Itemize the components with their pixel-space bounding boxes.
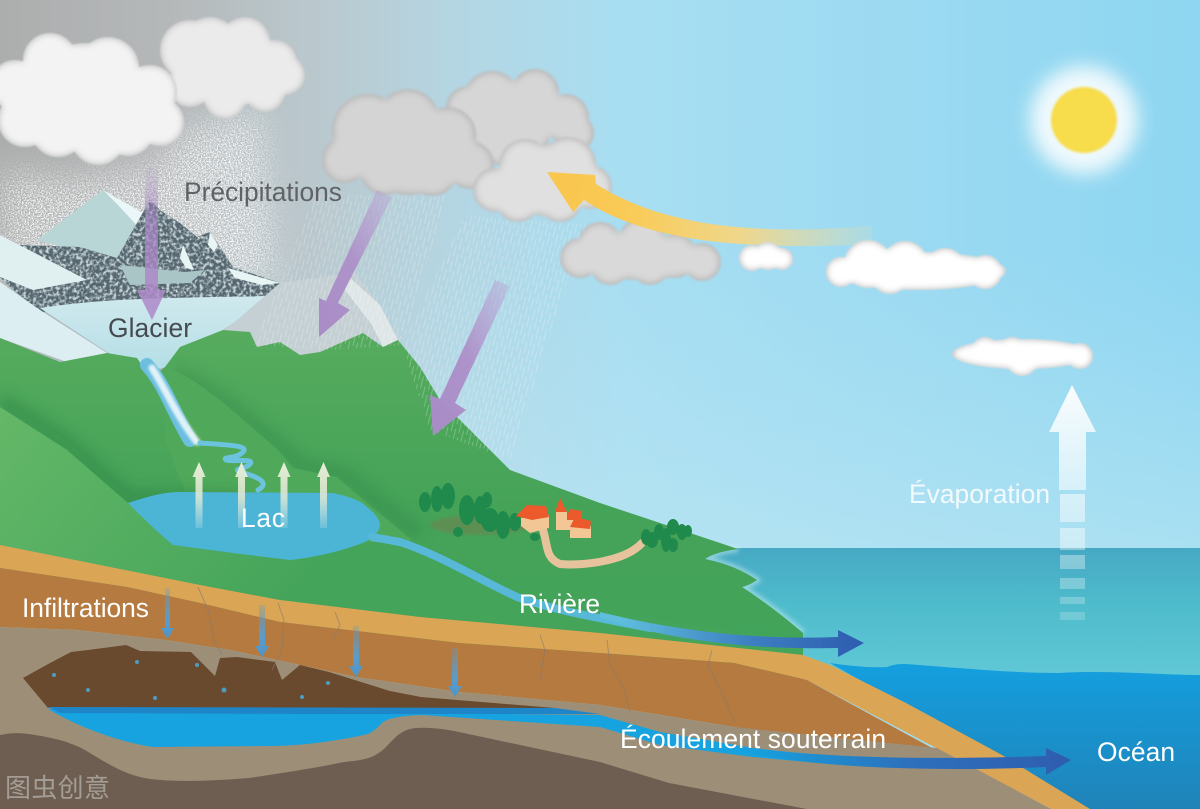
left hill [0, 407, 803, 680]
label: Écoulement souterrain: Écoulement souterrain [620, 724, 886, 754]
water drops [52, 660, 330, 700]
cloud: white right [826, 240, 1006, 294]
path [543, 530, 642, 564]
cracks in rock layers [198, 587, 735, 722]
trees left [419, 483, 540, 541]
underground flow arrow [740, 747, 1071, 775]
evaporation arrow [1049, 385, 1096, 620]
yellow wind arrow [547, 172, 872, 246]
ridge hill [165, 367, 412, 545]
sun [1030, 66, 1138, 174]
cloud: top left white [0, 33, 184, 165]
infiltration arrows [161, 588, 462, 697]
church [555, 498, 583, 530]
coast glow [705, 549, 803, 633]
deep ocean [830, 663, 1200, 809]
groundwater dark band [48, 707, 600, 714]
main green [0, 330, 803, 680]
river arrow [600, 612, 864, 657]
river [372, 537, 650, 628]
second house [570, 517, 591, 538]
cloud: large grey [322, 89, 494, 196]
bottom bedrock [0, 728, 807, 809]
white evaporation arrows over lake [192, 462, 330, 528]
glacier mountain [0, 190, 280, 368]
precipitation arrows [137, 168, 510, 436]
sky background [0, 0, 1200, 560]
snow ridge [103, 190, 143, 232]
watermark: 图虫创意 [5, 773, 110, 803]
green land [0, 330, 803, 680]
left snow slope [0, 282, 107, 362]
label: Océan: Océan [1097, 737, 1175, 767]
snowy peak [37, 190, 185, 262]
snow face [345, 278, 398, 347]
label: Évaporation: Évaporation [909, 479, 1050, 509]
upper snow slope [0, 235, 87, 290]
dark rocks [0, 200, 280, 312]
lighter rock band [120, 265, 205, 285]
cloud: top centre [160, 17, 305, 119]
waterfall and stream [147, 365, 263, 490]
label: Infiltrations: Infiltrations [22, 593, 149, 623]
arrow: glacier [137, 168, 166, 320]
arrow: mountain [319, 190, 392, 337]
house [516, 505, 549, 533]
glacier ice [40, 296, 267, 368]
ridge shadow [175, 372, 420, 535]
tree shadow [430, 515, 530, 535]
sea surface [690, 548, 1200, 678]
label: Lac: Lac [241, 503, 285, 533]
cloud: low grey [560, 218, 721, 285]
label: Rivière: Rivière [519, 589, 600, 619]
arrow: hillside [430, 280, 510, 436]
label: Glacier: Glacier [108, 313, 192, 343]
village and trees [419, 483, 692, 564]
cloud: small white [739, 242, 793, 271]
cave [23, 645, 555, 708]
valley shadow along left hill [0, 400, 240, 500]
label: Précipitations: Précipitations [184, 177, 342, 207]
trees right [641, 519, 692, 552]
cloud: back grey [446, 69, 594, 167]
cloud: front grey [473, 137, 612, 222]
snow falling from clouds [0, 110, 275, 290]
snow patches [180, 232, 280, 285]
orange soil layer [0, 545, 1090, 809]
cloud: white lower right [952, 337, 1093, 376]
lake [128, 492, 380, 560]
groundwater [48, 709, 840, 765]
rain [253, 195, 590, 460]
brown rock layer [0, 568, 945, 760]
snowy second mountain [223, 272, 400, 358]
tan rock layer [0, 627, 1051, 809]
